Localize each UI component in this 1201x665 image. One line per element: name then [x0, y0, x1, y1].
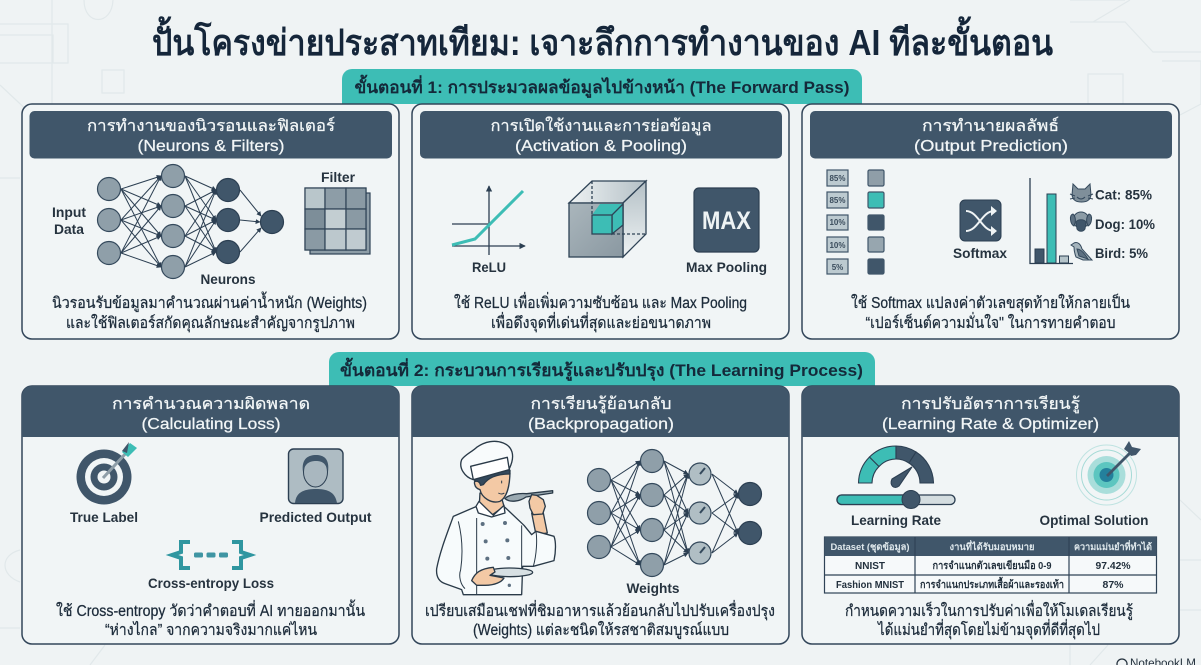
- panel header: การทำนายผลลัพธ์: [922, 116, 1059, 135]
- icon: max pooling: MAX: [702, 207, 751, 235]
- icon: target: [76, 442, 137, 504]
- body text: ใช้ ReLU เพื่อเพิ่มความซับซ้อน และ Max Pooling: [454, 292, 747, 312]
- body text: [851, 293, 1130, 332]
- panel header: [810, 111, 1172, 158]
- chart: ReLU: [452, 186, 525, 255]
- body text: “เปอร์เซ็นต์ความมั่นใจ" ในการทายคำตอบ: [866, 312, 1116, 332]
- output values column: 85%: [829, 174, 846, 183]
- body text: [845, 600, 1133, 640]
- body text: เปรียบเสมือนเชฟที่ชิมอาหารแล้วย้อนกลับไปปรับเครื่องปรุง: [425, 600, 775, 621]
- output values column: [827, 170, 848, 274]
- neural network diagram: [98, 164, 284, 278]
- output values column: 85%: [829, 196, 846, 205]
- table: dataset accuracy: Fashion MNIST: [836, 579, 905, 591]
- label: neurons: Neurons: [200, 271, 256, 287]
- panel header: (Learning Rate & Optimizer): [882, 416, 1099, 433]
- body text: [454, 292, 747, 333]
- body text: และใช้ฟิลเตอร์สกัดคุณลักษณะสำคัญจากรูปภาพ: [66, 314, 355, 333]
- table: dataset accuracy: NNIST: [855, 560, 886, 572]
- panel header: การเรียนรู้ย้อนกลับ: [530, 395, 672, 414]
- output neurons column: [868, 170, 884, 274]
- label: filter: Filter: [321, 169, 356, 185]
- coat buttons: [481, 521, 511, 587]
- icon: learning rate gauge: [858, 446, 934, 487]
- body text: ได้แม่นยำที่สุดโดยไม่ข้ามจุดที่ดีที่สุดไป: [876, 619, 1100, 640]
- table: dataset accuracy: การจำแนกตัวเลขเขียนมือ 0-9: [932, 559, 1052, 572]
- panel header: (Activation & Pooling): [515, 138, 687, 155]
- raised hand: [529, 495, 545, 515]
- panel header: (Output Prediction): [914, 138, 1068, 155]
- face: [474, 470, 510, 502]
- chef hat: [461, 441, 513, 480]
- icon: person: [288, 449, 343, 504]
- illustration: chef tasting food: [437, 441, 555, 595]
- panel header: (Backpropagation): [528, 416, 674, 433]
- bar chart: [1030, 178, 1073, 264]
- body text: ใช้ Softmax แปลงค่าตัวเลขสุดท้ายให้กลายเป็น: [851, 293, 1130, 313]
- output values column: 10%: [829, 241, 846, 250]
- panel header: [412, 386, 789, 437]
- panel header: การคำนวณความผิดพลาด: [112, 396, 310, 413]
- icon: cat: [1070, 184, 1093, 202]
- body text: นิวรอนรับข้อมูลมาคำนวณผ่านค่าน้ำหนัก (Weights): [52, 291, 367, 313]
- raised forearm: [532, 513, 547, 535]
- body text: กำหนดความเร็วในการปรับค่าเพื่อให้โมเดลเรียนรู้: [845, 600, 1133, 621]
- output values column: 5%: [832, 263, 843, 272]
- panel header: [802, 386, 1179, 437]
- hand holding plate: [472, 567, 504, 585]
- label: max pooling: Max Pooling: [686, 259, 767, 275]
- icon: pooling cube: [569, 181, 646, 257]
- label: input data: [52, 204, 86, 237]
- icon: dog: [1070, 212, 1092, 231]
- panel: calculating loss: [22, 386, 399, 644]
- panel: output prediction: [802, 104, 1179, 339]
- icon: max pooling: [694, 188, 759, 252]
- body text: เพื่อดึงจุดที่เด่นที่สุดและย่อขนาดภาพ: [491, 312, 711, 333]
- label: weights: Weights: [626, 580, 680, 596]
- collar: [476, 501, 505, 517]
- label: softmax: Softmax: [953, 245, 1007, 261]
- slider: [837, 490, 955, 508]
- filter grid: [305, 188, 370, 254]
- label: optimal solution: Optimal Solution: [1040, 512, 1148, 528]
- table: dataset accuracy: ความแม่นยำที่ทำได้: [1074, 539, 1152, 553]
- body text: “ห่างไกล” จากความจริงมากแค่ไหน: [105, 621, 317, 639]
- label: learning rate: Learning Rate: [851, 512, 941, 528]
- icon: softmax shuffle: [960, 200, 1001, 241]
- panel: backpropagation: [412, 386, 789, 644]
- panel header: การปรับอัตราการเรียนรู้: [901, 395, 1080, 414]
- label: input data: Input: [52, 204, 86, 220]
- icon: optimal solution target: [1076, 441, 1141, 505]
- section tab: step 1: [342, 69, 862, 104]
- panel header: [30, 111, 392, 158]
- label: dog: Dog: 10%: [1095, 216, 1156, 232]
- table: dataset accuracy: Dataset (ชุดข้อมูล): [830, 541, 910, 554]
- body text: [56, 599, 365, 639]
- icon: bird: [1071, 242, 1092, 260]
- label: ReLU: ReLU: [472, 259, 506, 275]
- panel header: การทำงานของนิวรอนและฟิลเตอร์: [87, 116, 335, 135]
- label: cat: Cat: 85%: [1095, 186, 1153, 202]
- body text: [52, 291, 367, 333]
- output values column: 10%: [829, 218, 846, 227]
- table: dataset accuracy: งานที่ได้รับมอบหมาย: [950, 539, 1034, 553]
- table: dataset accuracy: [824, 537, 1156, 593]
- icon: cross-entropy braces: [172, 542, 250, 568]
- panel: activation and pooling: [412, 104, 789, 339]
- neck: [479, 493, 504, 515]
- title: ปั้นโครงข่ายประสาทเทียม: เจาะลึกการทำงานของ AI ทีละขั้นตอน: [152, 16, 1053, 63]
- body text: ใช้ Cross-entropy วัดว่าคำตอบที่ AI ทายออกมานั้น: [56, 599, 365, 620]
- panel header: การเปิดใช้งานและการย่อข้อมูล: [490, 116, 712, 136]
- label: input data: Data: [54, 221, 84, 237]
- spoon: [505, 491, 553, 501]
- label: predicted output: Predicted Output: [260, 509, 372, 525]
- panel header: [420, 111, 782, 158]
- section tab: step 1: ขั้นตอนที่ 1: การประมวลผลข้อมูลไปข้างหน้า (The Forward Pass): [354, 74, 850, 99]
- panel: neurons and filters: [22, 104, 399, 339]
- section tab: step 2: [329, 352, 875, 386]
- plate: [487, 568, 533, 577]
- label: bird: Bird: 5%: [1095, 245, 1149, 261]
- label: cross-entropy loss: Cross-entropy Loss: [148, 575, 274, 591]
- panel header: (Neurons & Filters): [138, 138, 284, 155]
- table: dataset accuracy: 97.42%: [1096, 560, 1131, 572]
- label: true label: True Label: [70, 509, 138, 525]
- coat: [437, 506, 555, 595]
- table: dataset accuracy: การจำแนกประเภทเสื้อผ้าและรองเท้า: [920, 576, 1064, 591]
- section tab: step 2: ขั้นตอนที่ 2: กระบวนการเรียนรู้และปรับปรุง (The Learning Process): [340, 357, 863, 382]
- panel: learning rate and optimizer: [802, 386, 1179, 644]
- table: dataset accuracy: 87%: [1102, 579, 1124, 591]
- body text: [425, 600, 775, 640]
- panel header: (Calculating Loss): [142, 416, 280, 433]
- body text: (Weights) แต่ละชนิดให้รสชาติสมบูรณ์แบบ: [473, 621, 729, 640]
- panel header: [22, 386, 399, 437]
- neural network with weights: [588, 450, 762, 576]
